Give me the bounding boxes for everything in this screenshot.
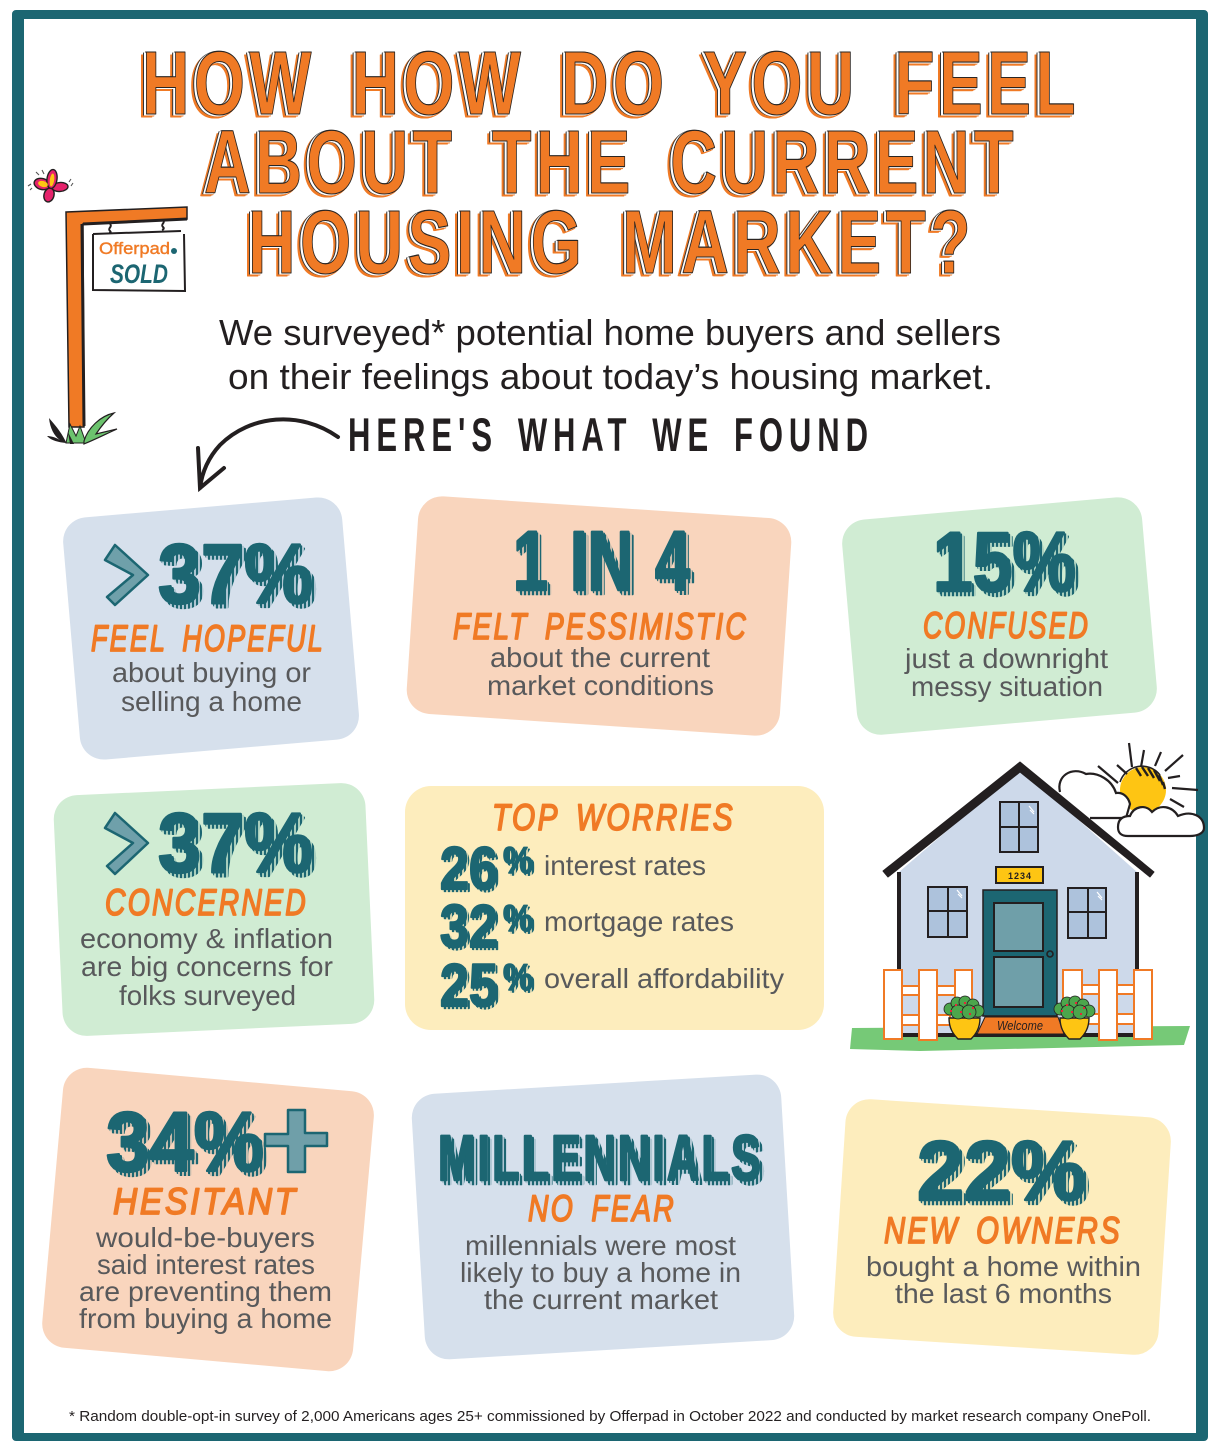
panel: concerned: 37% xyxy=(158,796,313,890)
stat: 25% overall affordability: % xyxy=(503,957,533,998)
panel: millennials: likely to buy a home in xyxy=(460,1257,741,1288)
panel: felt pessimistic: market conditions xyxy=(487,670,714,701)
arrow xyxy=(198,419,338,488)
flower pots xyxy=(944,996,1095,1039)
panel: concerned: CONCERNED xyxy=(105,882,308,923)
panel: confused: just a downright xyxy=(904,643,1108,674)
title: HOUSING MARKET? xyxy=(248,193,975,293)
welcome mat: Welcome xyxy=(997,1018,1043,1033)
icon: greater than chevron xyxy=(105,813,148,874)
icon: sold sign post xyxy=(47,207,187,444)
icon: greater than chevron xyxy=(105,545,148,605)
panel: feel hopeful: FEEL HOPEFUL xyxy=(91,618,325,659)
stat: 32% mortgage rates: 32 xyxy=(440,893,498,960)
stat: 26% interest rates: interest rates xyxy=(544,850,706,881)
icon: sold sign post: SOLD xyxy=(110,259,168,289)
panel: millennials: millennials were most xyxy=(465,1230,736,1261)
panel: new owners: 22% xyxy=(917,1124,1086,1218)
title xyxy=(142,34,1080,293)
stat: 32% mortgage rates: % xyxy=(503,898,533,939)
windows xyxy=(928,802,1106,938)
panel: felt pessimistic: 1 IN 4 xyxy=(513,514,690,608)
panel: felt pessimistic: about the current xyxy=(490,642,710,673)
house number plate xyxy=(996,867,1043,883)
subtitle text xyxy=(219,312,1001,397)
icon: butterfly xyxy=(28,169,73,203)
heading: here's what we found: HERE'S WHAT WE FOUND xyxy=(348,408,874,461)
panel: confused: 15% xyxy=(933,515,1076,609)
icon: grass xyxy=(850,1026,1190,1051)
panel: concerned xyxy=(53,782,375,1037)
panel: millennials: MILLENNIALS xyxy=(438,1122,763,1194)
icon: sold sign post: Offerpad xyxy=(99,239,170,258)
panel: hesitant: said interest rates xyxy=(97,1249,315,1280)
panel: new owners: bought a home within xyxy=(866,1251,1141,1282)
panel: new owners xyxy=(832,1098,1172,1356)
stat: 32% mortgage rates: mortgage rates xyxy=(544,906,734,937)
panel: feel hopeful xyxy=(61,495,361,762)
stat: 25% overall affordability xyxy=(440,952,784,1019)
panel: hesitant: are preventing them xyxy=(79,1276,332,1307)
illustration: house xyxy=(850,743,1204,1051)
panel: hesitant xyxy=(40,1066,376,1373)
stat: 26% interest rates xyxy=(440,835,706,902)
footnote: * Random double-opt-in survey of 2,000 Americans ages 25+ commissioned by Offerpad in October 2022 and conducted by market research company OnePoll. xyxy=(69,1409,1151,1425)
panel: feel hopeful: 37% xyxy=(158,527,313,621)
icon: sun and clouds xyxy=(1059,743,1204,836)
panel: new owners: NEW OWNERS xyxy=(884,1210,1122,1251)
panel: new owners: the last 6 months xyxy=(895,1278,1112,1309)
panel: hesitant: HESITANT xyxy=(113,1181,298,1222)
panel: hesitant: from buying a home xyxy=(79,1303,332,1334)
picket fence xyxy=(884,970,1152,1040)
panel: felt pessimistic: FELT PESSIMISTIC xyxy=(453,606,748,647)
welcome mat xyxy=(977,1017,1064,1034)
subtitle text: on their feelings about today’s housing market. xyxy=(228,356,993,397)
panel: millennials: the current market xyxy=(484,1284,718,1315)
panel: feel hopeful: selling a home xyxy=(121,686,302,717)
panel: feel hopeful: about buying or xyxy=(112,657,311,688)
panel: felt pessimistic xyxy=(405,495,793,737)
panel: millennials xyxy=(410,1073,796,1361)
stat: 25% overall affordability: overall affordability xyxy=(544,963,784,994)
panel: hesitant: 34% xyxy=(106,1095,264,1189)
panel: confused xyxy=(840,495,1159,737)
panel: concerned: economy & inflation xyxy=(80,923,333,954)
panel: top worries: TOP WORRIES xyxy=(492,797,735,838)
panel: concerned: folks surveyed xyxy=(119,980,296,1011)
panel: confused: CONFUSED xyxy=(923,605,1090,646)
stat: 26% interest rates: % xyxy=(503,840,533,881)
panel: concerned: are big concerns for xyxy=(81,951,333,982)
stat: 32% mortgage rates xyxy=(440,893,734,960)
panel: top worries xyxy=(405,786,824,1030)
panel: confused: messy situation xyxy=(911,671,1103,702)
stat: 26% interest rates: 26 xyxy=(440,835,498,902)
front door xyxy=(983,890,1057,1016)
icon: plus sign xyxy=(265,1110,327,1172)
stat: 25% overall affordability: 25 xyxy=(440,952,498,1019)
house walls and roof xyxy=(883,762,1154,1035)
panel: millennials: NO FEAR xyxy=(528,1188,676,1229)
panel: hesitant: would-be-buyers xyxy=(95,1222,315,1253)
subtitle text: We surveyed* potential home buyers and sellers xyxy=(219,312,1001,353)
house number plate: 1234 xyxy=(1008,871,1031,881)
